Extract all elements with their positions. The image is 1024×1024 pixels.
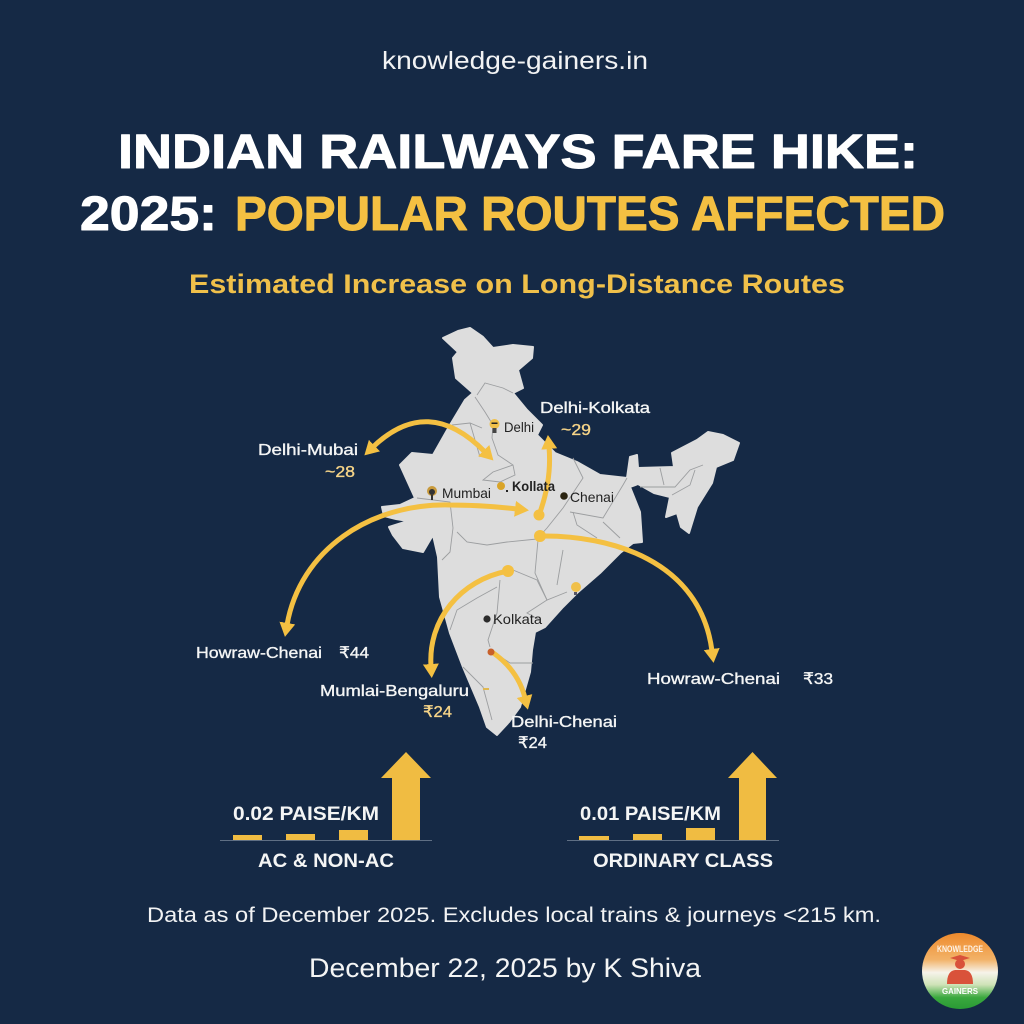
route label: Delhi-Chenai: ₹24 (518, 735, 547, 752)
class label: AC & NON-AC (258, 851, 394, 872)
subtitle: Estimated Increase on Long-Distance Routes (189, 269, 845, 299)
route label: Mumbai-Bengaluru: Mumlai-Bengaluru (320, 683, 469, 700)
route label: Howraw-Chenai right (647, 671, 833, 688)
chart: AC and non-AC (220, 752, 432, 872)
logo (922, 933, 998, 1009)
route label: Howraw-Chenai left: Howraw-Chenai (196, 645, 322, 662)
route label: Howraw-Chenai left (196, 645, 369, 662)
route: Delhi-Mubai arrow (373, 422, 485, 452)
route label: Delhi-Chenai (511, 714, 617, 752)
rate label: 0.02 PAISE/KM (233, 804, 379, 825)
logo: GAINERS (942, 986, 978, 996)
route: Howraw-Chenai left arrow (287, 505, 517, 625)
city labels: Mumbai (442, 485, 491, 501)
route label: Delhi-Mubai: ~28 (325, 464, 355, 481)
route: Delhi-Chenai arrow (492, 652, 525, 698)
city labels: Kolkata (493, 611, 542, 627)
route label: Delhi-Kolkata: ~29 (561, 422, 591, 439)
class label: ORDINARY CLASS (593, 851, 773, 872)
route: Howraw-Chenai right arrow (534, 530, 712, 651)
route label: Delhi-Mubai (258, 442, 358, 481)
icon: up arrow (381, 752, 431, 840)
city labels: Kollata (512, 478, 555, 494)
route label: Howraw-Chenai left: ₹44 (339, 645, 369, 662)
route label: Delhi-Kolkata: Delhi-Kolkata (540, 400, 650, 417)
route: Mumbai-Bengaluru arrow (431, 565, 514, 666)
city labels: Chenai (570, 489, 614, 505)
route label: Delhi-Chenai: Delhi-Chenai (511, 714, 617, 731)
title: POPULAR ROUTES AFFECTED (235, 188, 945, 241)
route label: Delhi-Kolkata (540, 400, 650, 439)
route label: Howraw-Chenai right: Howraw-Chenai (647, 671, 780, 688)
title: INDIAN RAILWAYS FARE HIKE: (118, 126, 918, 179)
date and author: December 22, 2025 by K Shiva (309, 953, 702, 983)
rate label: 0.01 PAISE/KM (580, 804, 721, 825)
route label: Mumbai-Bengaluru: ₹24 (423, 704, 452, 721)
data note: Data as of December 2025. Excludes local trains & journeys <215 km. (147, 904, 881, 927)
bars (579, 828, 715, 840)
icon: up arrow (728, 752, 777, 840)
route label: Howraw-Chenai right: ₹33 (803, 671, 833, 688)
title: 2025: (80, 188, 217, 241)
icon: graduate (947, 955, 973, 984)
city labels (442, 419, 614, 627)
city pins (427, 419, 581, 690)
city labels: Delhi (504, 419, 534, 435)
map: state borders (417, 383, 703, 720)
map: India outline (382, 328, 739, 735)
website url: knowledge-gainers.in (382, 47, 648, 75)
route label: Mumbai-Bengaluru (320, 683, 469, 721)
route: Delhi-Kolkata arrow (534, 447, 550, 520)
logo: KNOWLEDGE (937, 944, 983, 954)
route label: Delhi-Mubai: Delhi-Mubai (258, 442, 358, 459)
bars (233, 830, 368, 840)
map of India with routes (196, 328, 833, 752)
title (80, 126, 945, 241)
chart: ordinary class (567, 752, 779, 872)
